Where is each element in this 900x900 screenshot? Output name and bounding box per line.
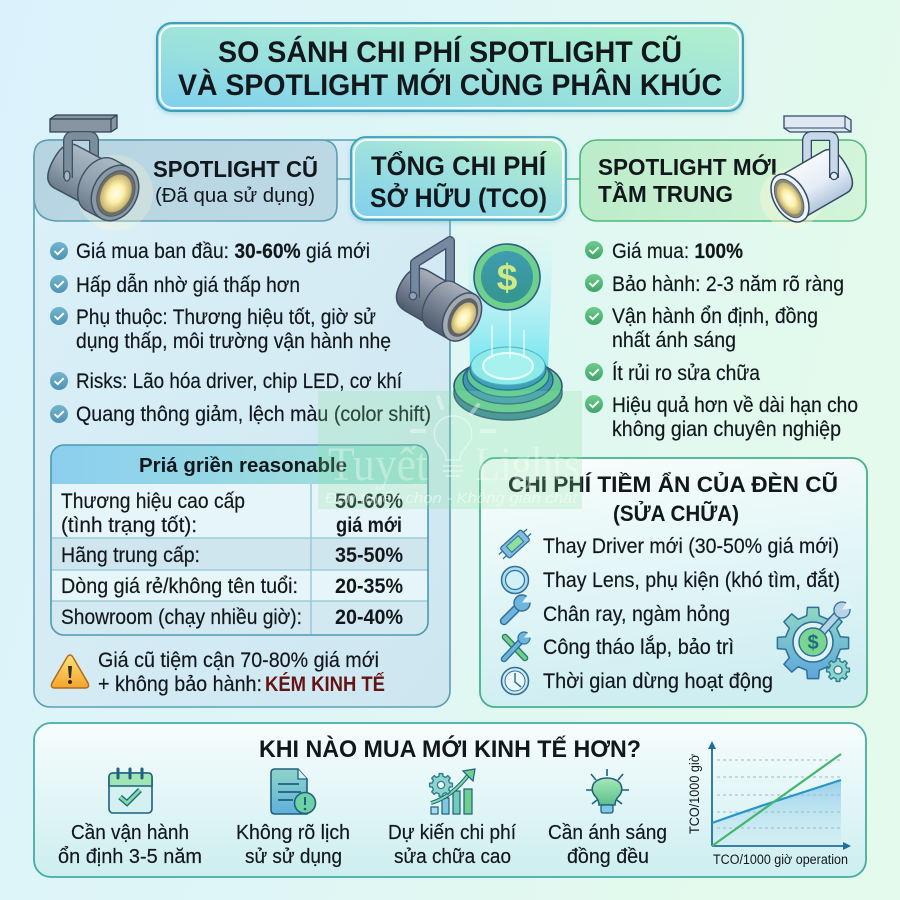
bullet 1: Giá mua ban đầu: 30-60% giá mới [76, 240, 370, 263]
item: driver [496, 526, 839, 562]
table: reasonable price: giá mới [336, 514, 402, 537]
bullet 5: Quang thông giảm, lệch màu (color shift) [76, 403, 431, 426]
heading: KHI NÀO MUA MỚI KINH TẾ HƠN? [259, 735, 641, 763]
callout: warning text: + không bảo hành: [98, 673, 262, 696]
bullet 3: nhất ánh sáng [612, 329, 736, 352]
list: new spotlight points [585, 240, 858, 441]
title banner [157, 23, 743, 111]
connector: old to center [337, 178, 351, 180]
bullet 5: Hiệu quả hơn về dài hạn cho [612, 394, 858, 417]
bullet 5: không gian chuyên nghiệp [612, 418, 841, 441]
table: reasonable price: 20-40% [335, 606, 403, 629]
icon: dollar coin [474, 244, 540, 310]
header: spotlight mới: SPOTLIGHT MỚI [598, 153, 777, 180]
item: clock: Thời gian dừng hoạt động [543, 670, 773, 693]
item: light bulb: đồng đều [567, 845, 649, 868]
table: reasonable price: Dòng giá rẻ/không tên tuổi: [61, 575, 298, 598]
watermark: Đèn tuyển chọn - Không gian chất [325, 490, 578, 507]
chart: TCO per 1000 hours: TCO/1000 giờ operation [713, 852, 848, 867]
item: light bulb [548, 769, 667, 868]
bullet 3 [50, 306, 391, 353]
table: reasonable price [51, 445, 428, 635]
table: reasonable price: (tình trạng tốt): [61, 514, 197, 537]
bullet 3: Vận hành ổn định, đồng [612, 305, 818, 328]
chart: TCO per 1000 hours [687, 741, 851, 867]
table: reasonable price: 50-60% [335, 490, 403, 513]
callout: warning text: KÉM KINH TẾ [265, 673, 385, 696]
icon: new spotlight [760, 116, 859, 229]
table: reasonable price: Thương hiệu cao cấp [61, 490, 245, 513]
table: reasonable price: 20-35% [335, 575, 403, 598]
heading box: TCO: SỞ HỮU (TCO) [370, 183, 547, 213]
table: reasonable price: 35-50% [335, 544, 403, 567]
watermark: Tuyết [328, 438, 429, 491]
item: tools [504, 631, 734, 659]
bullet 5 [585, 394, 858, 441]
table: reasonable price: Hãng trung cấp: [61, 544, 200, 567]
item: rising repair costs: Dự kiến chi phí [388, 821, 516, 844]
callout: warning text: Giá cũ tiệm cận 70-80% giá mới [98, 649, 379, 672]
item: rising repair costs: sửa chữa cao [394, 845, 511, 868]
icon: dollar coin: $ [497, 257, 518, 298]
header: spotlight cũ: (Đã qua sử dụng) [155, 184, 315, 207]
table: reasonable price: Showroom (chạy nhiều giờ): [61, 606, 302, 629]
item: calendar: ổn định 3-5 năm [58, 845, 202, 868]
bullet 2: Hấp dẫn nhờ giá thấp hơn [76, 274, 300, 297]
item: calendar [58, 769, 202, 868]
item: document [236, 769, 350, 868]
icon: gear with dollar: $ [807, 632, 819, 654]
item: driver: Thay Driver mới (30-50% giá mới) [543, 535, 839, 558]
item: wrench [504, 593, 730, 626]
item: light bulb: Cần ánh sáng [548, 821, 667, 844]
panel: when buying new is better [34, 723, 866, 877]
item: tools: Công tháo lắp, bảo trì [543, 636, 734, 659]
table: reasonable price: Priá griền reasonable [139, 454, 347, 477]
panel: hidden costs: CHI PHÍ TIỀM ẨN CỦA ĐÈN CŨ [508, 472, 838, 497]
header: spotlight mới: TẦM TRUNG [598, 180, 733, 207]
item: document: Không rõ lịch [236, 821, 350, 844]
item: lens: Thay Lens, phụ kiện (khó tìm, đắt) [543, 569, 840, 592]
item: wrench: Chân ray, ngàm hỏng [543, 603, 730, 626]
icon: warning triangle [51, 655, 89, 688]
panel: hidden costs: (SỬA CHỮA) [613, 501, 739, 526]
watermark [318, 391, 582, 509]
callout: warning text [98, 649, 385, 696]
bullet 1: Giá mua: 100% [612, 240, 743, 263]
bullet 3 [585, 305, 818, 352]
icon: old spotlight [40, 115, 153, 231]
chart: TCO per 1000 hours: TCO/1000 giờ [687, 754, 702, 834]
heading box: TCO: TỔNG CHI PHÍ [371, 151, 547, 181]
list: old spotlight points [50, 240, 431, 426]
connector: center to new [566, 178, 580, 180]
title banner: SO SÁNH CHI PHÍ SPOTLIGHT CŨ [218, 35, 682, 69]
illustration: TCO hologram [388, 234, 562, 420]
item: rising repair costs [388, 769, 516, 868]
bullet 2: Bảo hành: 2-3 năm rõ ràng [612, 273, 844, 296]
header: spotlight cũ: SPOTLIGHT CŨ [153, 155, 318, 182]
bullet 4: Risks: Lão hóa driver, chip LED, cơ khí [76, 370, 402, 393]
item: calendar: Cần vận hành [71, 821, 189, 844]
item: clock [502, 668, 773, 694]
item: document: sử sử dụng [245, 845, 342, 868]
bullet 3: dụng thấp, môi trường vận hành nhẹ [76, 330, 391, 353]
panel: spotlight cũ [34, 115, 450, 707]
header: spotlight mới [580, 140, 866, 221]
panel: hidden costs [480, 458, 867, 707]
header: spotlight cũ [34, 140, 337, 221]
base platform [454, 347, 562, 420]
bullet 4: Ít rủi ro sửa chữa [612, 362, 760, 385]
icon: spotlight over base [388, 241, 490, 348]
light beam [468, 234, 553, 370]
title banner: VÀ SPOTLIGHT MỚI CÙNG PHÂN KHÚC [178, 68, 722, 102]
bullet 3: Phụ thuộc: Thương hiệu tốt, giờ sử [76, 306, 376, 329]
watermark: Lights [475, 438, 580, 491]
heading box: TCO [351, 137, 566, 220]
icon: gear with dollar [777, 601, 853, 681]
